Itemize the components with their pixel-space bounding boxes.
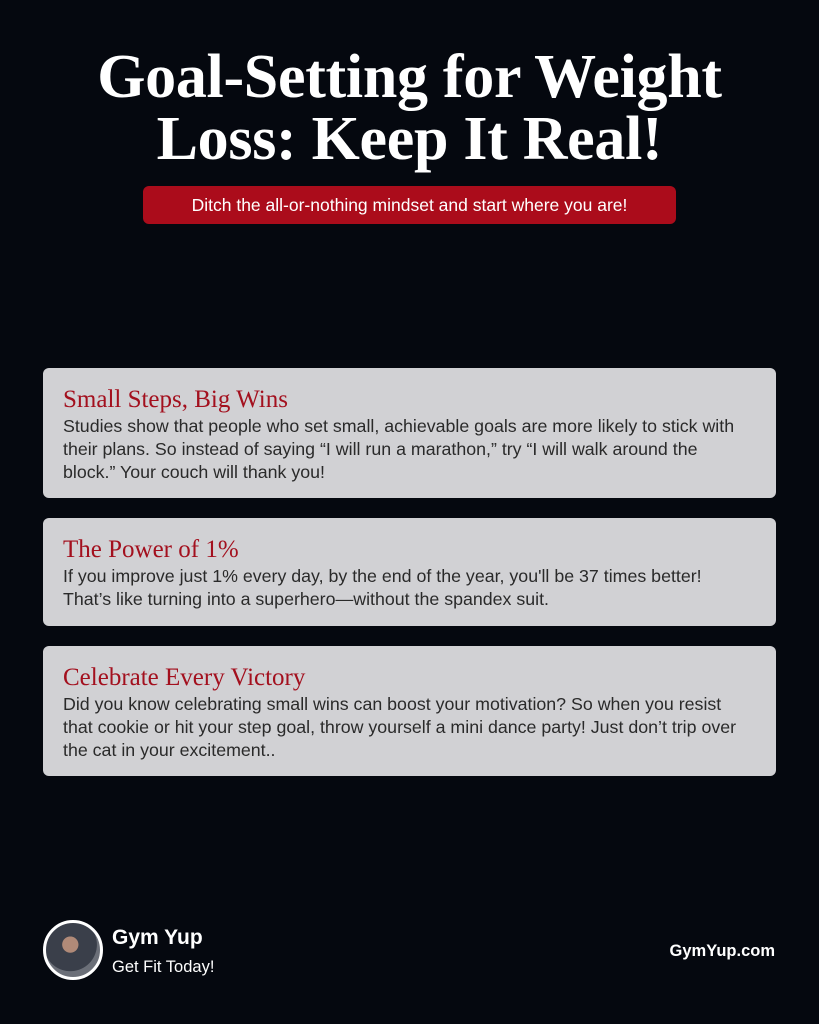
panel: small steps [43, 368, 776, 498]
heading: Small Steps, Big Wins [63, 386, 288, 413]
text block: That’s like turning into a superhero—without the spandex suit. [63, 589, 549, 609]
title: Loss: Keep It Real! [157, 105, 662, 173]
text block: block.” Your couch will thank you! [63, 462, 325, 482]
heading: The Power of 1% [63, 536, 239, 563]
heading: Celebrate Every Victory [63, 664, 305, 691]
subtitle pill [143, 186, 676, 224]
text block [63, 694, 736, 760]
text block: the cat in your excitement.. [63, 740, 276, 760]
title: Goal-Setting for Weight [97, 43, 722, 111]
panel: celebrate [43, 646, 776, 776]
text block [63, 566, 702, 609]
text block: that cookie or hit your step goal, throw yourself a mini dance party! Just don’t trip over [63, 717, 736, 737]
website: GymYup.com [670, 942, 775, 960]
subtitle pill: Ditch the all-or-nothing mindset and start where you are! [192, 195, 627, 215]
text block: Studies show that people who set small, achievable goals are more likely to stick with [63, 416, 734, 436]
brand name: Gym Yup [112, 926, 203, 949]
tagline: Get Fit Today! [112, 958, 214, 976]
text block: Did you know celebrating small wins can boost your motivation? So when you resist [63, 694, 721, 714]
title [97, 43, 722, 173]
text block: their plans. So instead of saying “I will run a marathon,” try “I will walk around the [63, 439, 697, 459]
text block [63, 416, 734, 482]
text block: If you improve just 1% every day, by the end of the year, you'll be 37 times better! [63, 566, 702, 586]
icon: avatar [43, 920, 103, 980]
panel: power of 1% [43, 518, 776, 626]
